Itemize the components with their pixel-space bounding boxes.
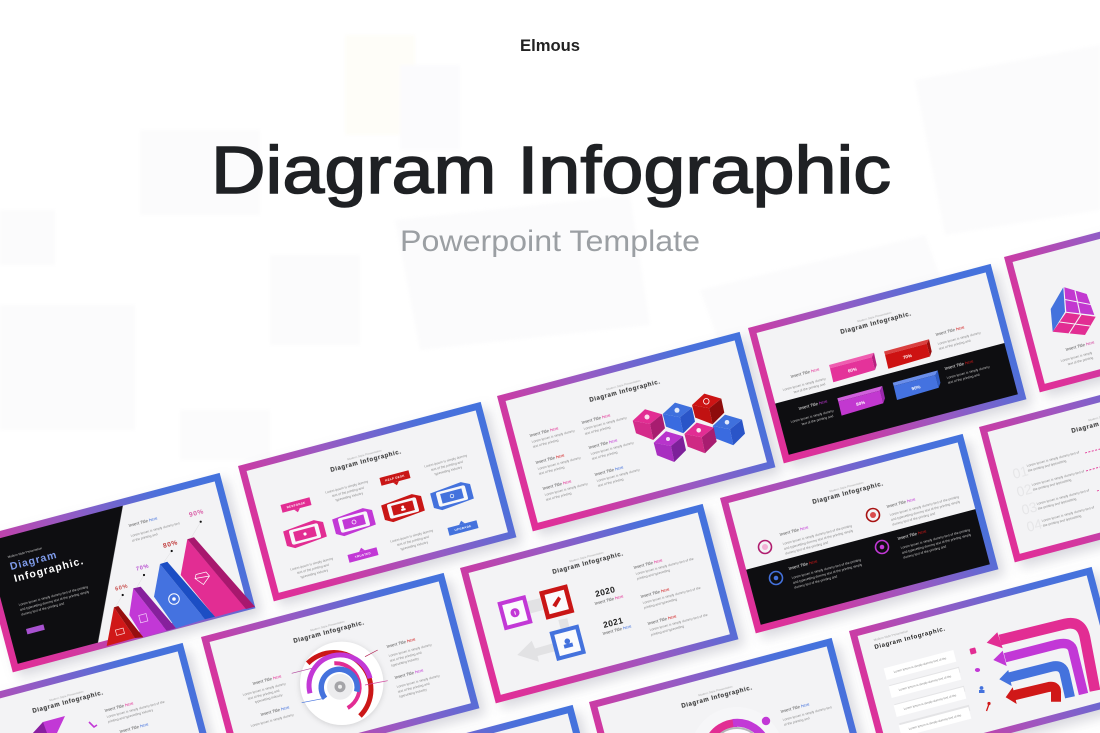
dark panel text [7,546,91,617]
list text: Lorem ipsum is simply dummy text of [1031,469,1085,487]
text blocks: text of the printing and [793,382,826,394]
text rows: Lorem ipsum is simply dummy text of the [908,713,962,731]
list text: Lorem ipsum is simply dummy text of [1026,450,1080,468]
panel: slide with numbered list (right) [983,367,1100,558]
text block: Lorem ipsum is simply dummy text [782,705,832,722]
text blocks: text of the printing and [939,339,971,351]
text blocks: Lorem ipsum is simply dummy [790,409,834,424]
panel: slide with percentage bricks [752,268,1022,459]
numbered list: 03 [1020,498,1039,518]
curved arrow purple [993,644,1084,694]
text blocks: Insert Title here [640,586,670,599]
text block: of the printing and [132,532,158,543]
lorem blocks: Lorem ipsum is simply dummy [290,556,334,572]
panel: slide with tagged boxes [242,406,512,597]
square blue [549,624,586,661]
text blocks: and typesetting dummy text of the printing simply [784,529,854,551]
slide frame [464,508,734,699]
tag: upgrade: UPGRADE [454,524,472,532]
text blocks: Insert Title here [529,425,559,438]
numbered list: 02 [1015,480,1034,500]
lorem blocks [290,453,471,581]
text blocks: printing and typesetting [651,624,685,637]
slide frame: Modern Style Presentation [569,550,604,563]
heading: main title: Diagram Infographic [211,133,891,208]
year 2021: 2021 [602,615,624,630]
centre icon [327,674,353,700]
text blocks: and typesetting dummy text of the printing simply [793,563,863,585]
3D arrow shape [33,716,65,733]
text blocks [633,557,709,637]
box blue [429,480,475,512]
chart percentages: 60% [115,583,129,593]
box red [380,492,426,524]
slide frame: Diagram Infographic. [681,684,753,710]
tag: upgrade [447,517,479,536]
slide frame [593,642,863,733]
text blocks: dummy text of the printing and [785,540,829,556]
panel: slide bottom centre [593,642,863,733]
text blocks: text of the printing and [801,414,834,426]
button [26,624,45,634]
slide frame [0,477,251,668]
brick 70%: 70% [902,353,912,360]
slide frame: Modern Style Presentation [49,689,84,702]
slide frame [853,571,1100,733]
text blocks: typesetting industry [399,687,428,699]
slide frame: Modern Style Presentation [606,378,641,391]
text block: Insert Title here [104,700,134,713]
donut chart [690,707,784,733]
panel: slide with concentric arcs [205,577,475,733]
tag: help desk [379,470,411,489]
text blocks: dummy text of the printing and [892,511,936,527]
text blocks: Insert Title here [542,478,572,491]
text blocks: text of the printing [546,491,572,502]
text blocks: text of the printing [585,425,611,436]
slide frame [0,647,214,733]
text blocks: printing and typesetting [637,568,671,581]
text block: Insert Title here [1065,339,1095,352]
slide frame: Diagram Infographic. [812,480,884,506]
text blocks: Insert Title here [594,464,624,477]
square red [539,584,574,620]
curved arrow pink [987,623,1095,691]
text blocks: Lorem ipsum is simply dummy [544,482,588,497]
chart percentages [115,508,205,596]
text blocks: typesetting industry [254,693,283,704]
brick 90%: 90% [911,384,921,391]
square purple [497,595,533,630]
text rows: Lorem ipsum is simply dummy text of the [903,693,957,711]
lorem text: Lorem ipsum is simply [1060,351,1093,363]
list text: the printing and typesetting [1043,514,1082,528]
tag: trusted: TRUSTED [355,551,371,559]
lorem blocks: text of the printing and [332,486,364,498]
concentric arcs [308,653,371,716]
slide frame [752,268,1022,459]
panel: slide with curved arrows [853,571,1100,733]
icons on mountains [115,572,210,635]
lorem blocks: typesetting industry [300,568,329,579]
text blocks: Insert Title here [633,557,663,570]
text blocks: Insert Title here [790,366,820,379]
text blocks: Lorem ipsum is simply dummy text of the [642,586,701,605]
text blocks: Lorem ipsum is simply dummy text of the printing [900,528,970,550]
dark panel text: and typesetting dummy text of the printing simply [20,590,90,612]
text blocks: Insert Title here [897,528,927,541]
grey arrow connectors [517,598,569,662]
lorem text: text of the printing [1067,356,1094,366]
slide frame [242,406,512,597]
slide frame [1008,197,1100,388]
lorem blocks: Lorem ipsum is simply dummy [390,528,434,544]
list text: the printing and typesetting [1038,497,1077,511]
text blocks: Insert Title here [779,524,809,537]
panel: slide with mountain chart [0,477,255,668]
list text: the printing and typesetting [1028,459,1067,473]
text blocks: Lorem ipsum is simply dummy text of the printing [791,558,861,580]
text blocks: dummy text of the printing and [903,544,947,560]
text block: Lorem ipsum is simply dummy text of the [106,700,165,719]
tag: trusted [347,544,379,563]
text blocks: Insert Title here [581,412,611,425]
text blocks: Lorem ipsum is simply dummy [782,377,826,392]
text block: Lorem ipsum is simply dummy text [130,521,180,538]
panel: slide with 3D cube (top right) [1008,197,1100,388]
list text: the printing and typesetting [1033,478,1072,492]
heading: brand name: Elmous [520,36,580,55]
text blocks [779,495,973,590]
text blocks: text of the printing [592,450,618,461]
dark panel text: dummy text of the printing and [21,601,65,617]
text blocks: Insert Title here [260,704,290,717]
slide frame: Modern Style Presentation [698,684,733,697]
brick 80%: 80% [856,400,866,407]
lorem blocks: text of the printing and [297,563,329,575]
panel: slide with timeline squares [464,508,734,699]
text blocks: text of the printing [533,438,559,449]
text blocks: Insert Title here [252,673,282,686]
brick 80% [837,386,885,416]
text block: Insert Title here [128,515,158,528]
panel: slide bottom centre-left (mostly cropped) [334,709,604,733]
lorem blocks: Lorem ipsum is simply dummy [325,479,369,495]
brick 60% [829,353,877,382]
text blocks: Insert Title here [944,358,974,371]
chart percentages: 90% [188,508,205,519]
panel: slide with circle badges [724,438,994,629]
label 2020: Insert Title here [594,593,624,606]
text blocks: Lorem ipsum is simply dummy [583,416,627,431]
slide frame [983,367,1100,558]
pink dashes [1085,449,1100,491]
text blocks: Lorem ipsum is simply dummy [590,441,634,456]
text blocks: text of the printing [598,477,624,488]
list text [1026,450,1096,528]
slide frame: Diagram Infographic. [840,310,912,336]
brick 60%: 60% [847,366,857,374]
text blocks: text of the printing [539,465,565,476]
text blocks: Lorem ipsum is simply dummy [250,713,294,728]
dark panel text: Infographic. [13,555,85,585]
text blocks: Lorem ipsum is simply dummy text of the printing [889,495,959,517]
text block: Insert Title here [780,701,810,714]
text blocks: Insert Title here [386,636,416,649]
lorem blocks: typesetting industry [400,540,429,551]
text blocks: Lorem ipsum is simply dummy text of the printing [782,524,852,546]
chart percentages: 80% [162,539,179,550]
text blocks: Lorem ipsum is simply dummy [937,331,981,346]
brick 70% [884,339,932,369]
text blocks: Lorem ipsum is simply dummy [537,456,581,471]
curved arrow red [1006,687,1056,704]
numbered list: 01 [1011,462,1030,482]
mountain chart [107,537,255,646]
text block: of the printing and [784,716,810,727]
text blocks: Insert Title here [588,437,618,450]
text blocks: Insert Title here [394,667,424,680]
slide frame [205,577,475,733]
text blocks: text of the printing and [390,651,422,663]
text blocks: Lorem ipsum is simply dummy [596,468,640,483]
slide frame: Diagram Infographic. [552,550,624,576]
text blocks [242,636,443,728]
text rows: Lorem ipsum is simply dummy text of the [893,656,947,674]
icon [89,722,97,727]
text blocks: Lorem ipsum is simply dummy [946,365,990,380]
slide frame: Modern Style Presentation [857,310,892,323]
brick 90% [893,370,940,400]
text rows [884,650,971,733]
text blocks: text of the printing and [398,682,430,694]
text blocks: Lorem ipsum is simply dummy [531,429,575,444]
text blocks: typesetting industry [391,656,420,668]
slide frame: Modern Style Presentation [310,619,345,632]
numbered list: 04 [1025,515,1044,535]
circle badges [758,508,888,584]
slide frame: Diagram Infographic. [330,448,402,474]
lorem blocks: Lorem ipsum is simply dummy [424,453,468,469]
slide heading: Diagram Infographic. [874,625,946,651]
box pink [282,518,328,550]
tag: help desk: HELP DESK [385,473,406,483]
slide frame: Diagram Infographic. [589,378,661,404]
text blocks: Lorem ipsum is simply dummy [396,674,440,689]
text blocks: and typesetting dummy text of the printing simply [891,500,961,522]
numbered list [1011,462,1044,535]
purple dot [762,717,770,725]
slide frame: Modern Style Presentation [829,480,864,493]
text blocks: Insert Title here [535,452,565,465]
slide frame: Diagram Infographic. [293,619,365,645]
leader lines [292,650,388,703]
text blocks: printing and typesetting [644,597,678,610]
box purple [331,506,377,538]
tag: response: RESPONSE [286,501,306,509]
slide heading: Modern Style Presentation [873,629,909,642]
list text: Lorem ipsum is simply dummy text of [1041,505,1095,523]
text blocks [782,324,992,429]
panel: slide bottom left [0,647,214,733]
lorem blocks: text of the printing and [397,535,429,547]
thin leader lines [116,522,201,606]
lorem blocks: text of the printing and [431,460,463,472]
small icons [969,647,991,711]
tag: response [280,497,312,516]
year 2020: 2020 [594,584,616,599]
text block [780,701,834,727]
slide frame: Modern Style Presentation [347,448,382,461]
lorem blocks: typesetting industry [434,465,463,476]
curved arrow blue [999,666,1070,697]
dark panel text: Diagram [9,549,58,573]
text blocks: Insert Title here [886,496,916,509]
heading: subtitle: Powerpoint Template [400,225,700,258]
isometric cubes [633,394,745,462]
text blocks: Lorem ipsum is simply dummy text of the [635,557,694,576]
text blocks: text of the printing and [948,373,980,385]
text blocks: text of the printing and [247,689,280,701]
text blocks: dummy text of the printing and [794,574,838,590]
text blocks: Insert Title here [788,558,818,571]
text block: printing and typesetting industry [108,708,154,724]
text blocks: Insert Title here [647,613,677,626]
text blocks: Insert Title here [935,324,965,337]
text block [104,700,166,733]
slide frame [501,336,771,527]
text blocks: Lorem ipsum is simply dummy text of the [649,613,708,632]
dark panel text: Modern Style Presentation [7,546,43,559]
text blocks: and typesetting dummy text of the printing simply [902,533,972,555]
slide frame: Diagram Infographic. [32,689,104,715]
text blocks: Lorem ipsum is simply dummy [242,682,286,697]
text rows: Lorem ipsum is simply dummy text of the [898,674,952,692]
text block [128,515,182,543]
text blocks [529,412,642,502]
icon: 3D cube [1051,287,1096,335]
panel: slide with hexagon cubes [501,336,771,527]
faint ghost slides background [0,35,1100,460]
lorem blocks: typesetting industry [335,491,364,502]
label 2021: Insert Title here [602,623,632,636]
slide frame [724,438,994,629]
dark panel text: Lorem ipsum is simply dummy text of the printing [18,585,88,607]
list text: Lorem ipsum is simply dummy text of [1036,488,1090,506]
text blocks: Lorem ipsum is simply dummy [388,643,432,658]
white disc [300,642,383,725]
text blocks: Insert Title here [798,398,828,411]
chart percentages: 70% [136,563,150,573]
